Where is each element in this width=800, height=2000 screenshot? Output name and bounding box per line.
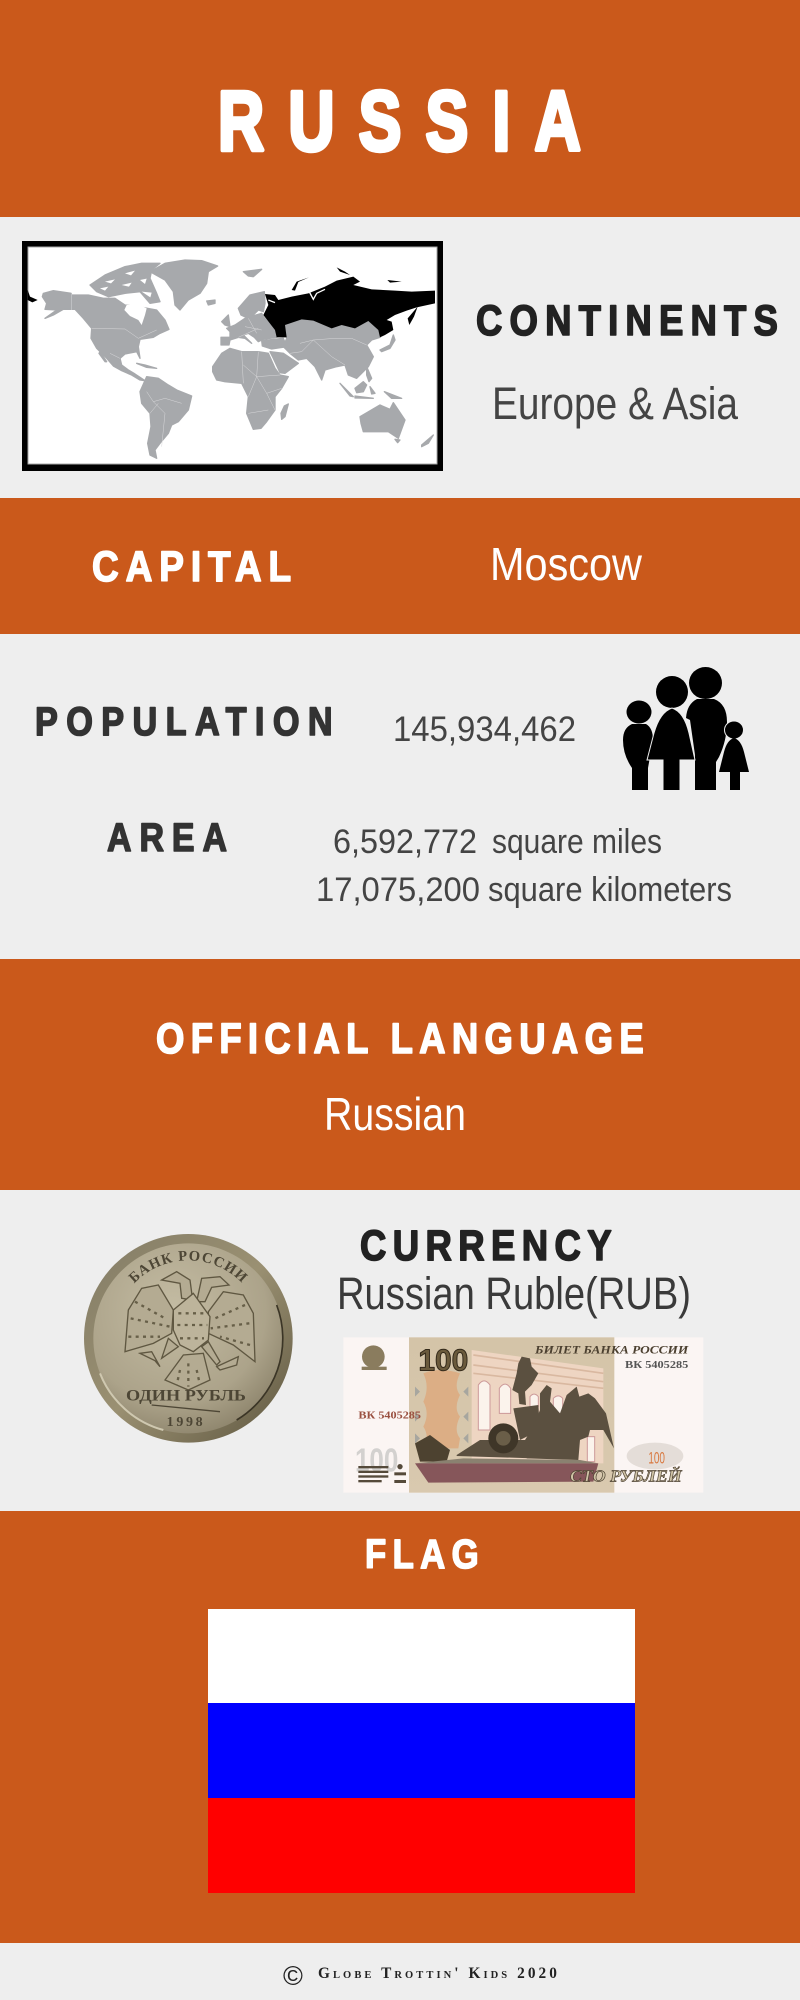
text: area values: square miles	[492, 823, 662, 861]
icon: one ruble coin	[84, 1234, 293, 1443]
panel: population and area	[35, 667, 749, 909]
heading: capital: CAPITAL	[92, 543, 298, 591]
footer	[283, 1961, 560, 1991]
footer credit: Globe Trottin' Kids 2020	[318, 1965, 560, 1982]
panel: flag	[0, 1511, 800, 1943]
text: area values	[316, 823, 732, 909]
heading: area: AREA	[107, 816, 235, 860]
banknote	[343, 1337, 703, 1493]
banknote: 100	[418, 1344, 468, 1378]
panel: title band	[0, 0, 800, 217]
text: language value: Russian	[324, 1088, 466, 1140]
text: population value: 145,934,462	[393, 710, 576, 749]
panel: currency	[84, 1222, 703, 1493]
icon: family	[623, 667, 749, 790]
chukotka tip	[28, 290, 38, 302]
banknote: БИЛЕТ БАНКА РОССИИ	[534, 1342, 689, 1356]
icon: one ruble coin: БАНК РОССИИ	[128, 1250, 248, 1284]
title: RUSSIA	[218, 74, 605, 168]
banknote: 100	[355, 1443, 398, 1480]
text: area values: square kilometers	[488, 871, 732, 909]
heading: flag: FLAG	[365, 1531, 485, 1577]
eurasia, africa, oceania	[213, 267, 435, 447]
americas	[42, 260, 230, 458]
world map	[22, 241, 443, 471]
banknote: ВК 5405285	[625, 1360, 688, 1371]
panel: continents	[22, 241, 785, 471]
panel: official language	[0, 959, 800, 1190]
heading: official language: OFFICIAL LANGUAGE	[156, 1015, 650, 1063]
text: currency value: Russian Ruble(RUB)	[337, 1268, 691, 1319]
text: continents value: Europe & Asia	[492, 378, 739, 429]
icon: one ruble coin: 1998	[167, 1415, 205, 1430]
text: capital value: Moscow	[490, 538, 643, 590]
banknote: СТО РУБЛЕЙ	[570, 1467, 682, 1486]
panel: capital	[0, 498, 800, 634]
banknote: ВК 5405285	[358, 1411, 421, 1422]
text: area values: 6,592,772	[333, 823, 477, 861]
heading: currency: CURRENCY	[360, 1222, 618, 1270]
text: area values: 17,075,200	[316, 871, 480, 909]
icon: copyright: ©	[283, 1961, 303, 1991]
heading: population: POPULATION	[35, 700, 341, 744]
russia highlighted	[263, 267, 435, 337]
russian flag	[208, 1609, 635, 1893]
banknote: 100	[648, 1448, 665, 1467]
icon: one ruble coin: ОДИН РУБЛЬ	[126, 1388, 246, 1405]
